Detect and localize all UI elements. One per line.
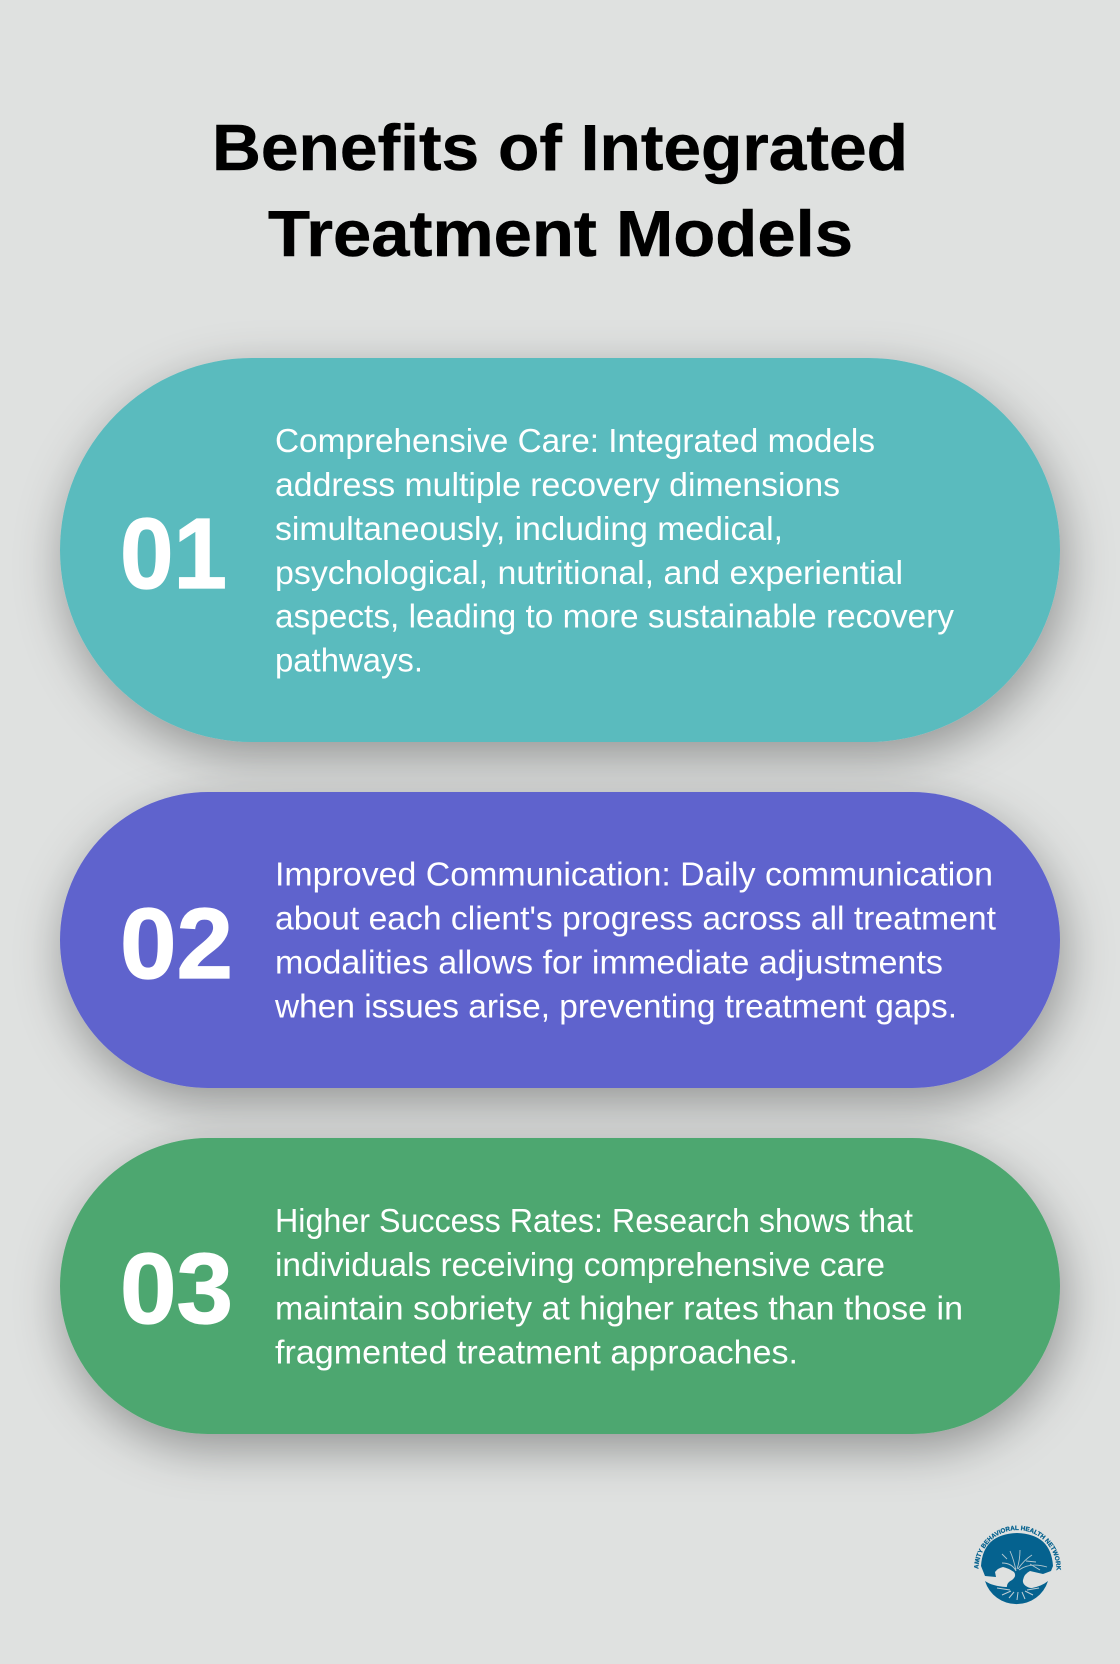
text block: improved communication: when issues arise, preventing treatment gaps.	[274, 988, 957, 1024]
panel: 01 comprehensive care	[60, 358, 1060, 742]
text block: comprehensive care: Comprehensive Care: Integrated models	[275, 422, 875, 459]
icon: Amity Behavioral Health Network logo	[974, 1526, 1062, 1604]
number 03: 03	[120, 1233, 233, 1345]
number 01: 01	[120, 498, 227, 610]
panel: 02 improved communication	[60, 792, 1060, 1088]
tree branches	[1002, 1550, 1047, 1571]
text block: higher success rates: fragmented treatment approaches.	[275, 1334, 798, 1370]
title	[212, 111, 908, 270]
text block: improved communication: about each client's progress across all treatment	[275, 900, 996, 936]
text block: improved communication: Improved Communication: Daily communication	[275, 856, 993, 892]
text block: improved communication: modalities allows for immediate adjustments	[275, 944, 943, 980]
text block: higher success rates	[275, 1202, 963, 1370]
text block: comprehensive care: aspects, leading to more sustainable recovery	[275, 598, 954, 634]
text block: higher success rates: Higher Success Rates: Research shows that	[275, 1202, 913, 1239]
text block: comprehensive care: address multiple recovery dimensions	[275, 466, 840, 503]
panel: 03 higher success rates	[60, 1138, 1060, 1434]
text block: comprehensive care	[275, 422, 954, 678]
tree canopy and trunk	[981, 1533, 1053, 1588]
text block: comprehensive care: simultaneously, including medical,	[275, 510, 783, 547]
text block: higher success rates: individuals receiving comprehensive care	[275, 1246, 885, 1283]
root lines	[997, 1588, 1039, 1600]
logo ring text: AMITY BEHAVIORAL HEALTH NETWORK	[974, 1526, 1062, 1570]
title: Treatment Models	[268, 197, 853, 270]
text block: improved communication	[274, 856, 996, 1024]
tree roots bowl	[985, 1581, 1048, 1604]
number 02: 02	[120, 888, 233, 1000]
text block: comprehensive care: psychological, nutritional, and experiential	[275, 554, 903, 591]
text block: higher success rates: maintain sobriety at higher rates than those in	[275, 1290, 963, 1326]
title: Benefits of Integrated	[212, 111, 908, 184]
text block: comprehensive care: pathways.	[275, 642, 423, 678]
